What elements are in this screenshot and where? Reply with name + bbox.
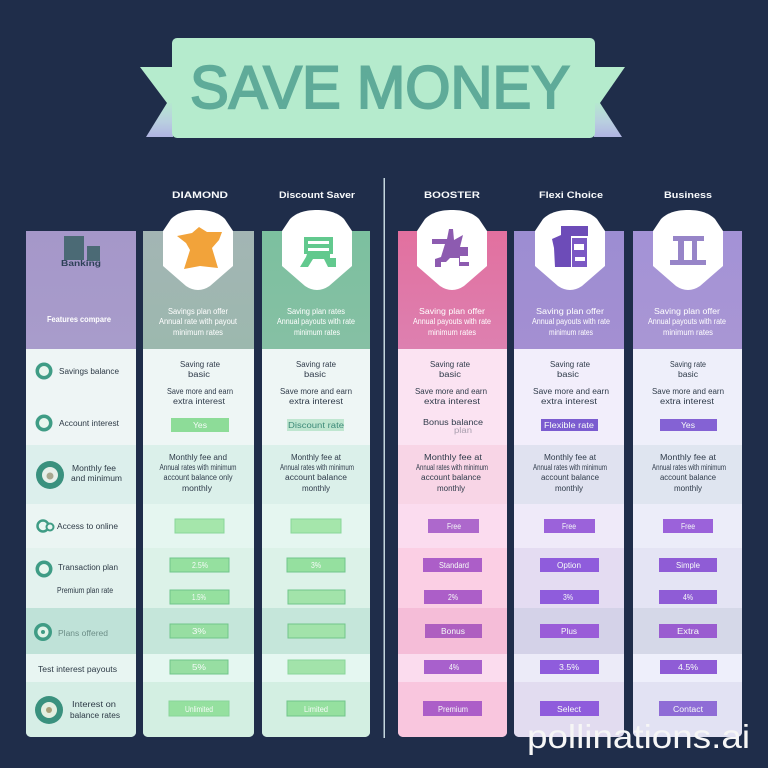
cell text: extra interest bbox=[289, 397, 344, 406]
cell text: basic bbox=[678, 370, 698, 379]
cell text: Monthly fee at bbox=[291, 453, 342, 462]
header description: Annual payouts with rate bbox=[532, 317, 610, 326]
value bar: 4% bbox=[449, 663, 459, 672]
header description: Annual payouts with rate bbox=[648, 317, 726, 326]
label: header description: Features compare bbox=[47, 315, 112, 324]
cell text: Saving rate bbox=[180, 360, 221, 369]
icon: orange hexagon bbox=[163, 210, 233, 290]
header description bbox=[159, 307, 238, 337]
value bar bbox=[171, 418, 229, 432]
row icon 1 bbox=[36, 362, 52, 380]
cell text bbox=[416, 453, 488, 493]
value bar: 3.5% bbox=[559, 663, 579, 672]
row label 8: Interest on bbox=[72, 700, 116, 709]
cell text: Annual rates with minimum bbox=[416, 463, 488, 472]
cell text bbox=[652, 453, 726, 493]
header description: Saving plan rates bbox=[287, 307, 345, 316]
row icon 6 bbox=[34, 623, 52, 641]
cell text: Save more and earn bbox=[652, 387, 724, 396]
column heading: DIAMOND bbox=[172, 190, 229, 200]
value bar bbox=[423, 558, 482, 572]
row label 1: Savings balance bbox=[59, 367, 120, 376]
panel: plan 2 green bbox=[262, 190, 370, 737]
row label 2: Account interest bbox=[59, 419, 120, 428]
value bar bbox=[540, 624, 599, 638]
cell text: Monthly fee at bbox=[424, 453, 483, 462]
value bar bbox=[544, 519, 595, 533]
title text: SAVE MONEY bbox=[190, 54, 570, 121]
cell text bbox=[533, 360, 609, 406]
cell text: Save more and earn bbox=[167, 387, 233, 396]
header description: minimum rates bbox=[549, 328, 593, 337]
value bar: 3% bbox=[563, 593, 573, 602]
value bar: Yes bbox=[681, 421, 695, 430]
value bar: Flexible rate bbox=[544, 421, 595, 430]
value bar bbox=[288, 590, 345, 604]
header description: Annual payouts with rate bbox=[277, 317, 355, 326]
header description bbox=[277, 307, 355, 337]
value bar bbox=[288, 660, 345, 674]
value bar bbox=[541, 419, 598, 431]
cell text: monthly bbox=[302, 484, 330, 493]
icon: buildings bbox=[61, 236, 101, 268]
value bar: 2% bbox=[448, 593, 458, 602]
value bar: Free bbox=[681, 522, 695, 531]
value bar: Free bbox=[447, 522, 461, 531]
cell text: Saving rate bbox=[430, 360, 471, 369]
cell text bbox=[652, 360, 724, 406]
cell text: Save more and earn bbox=[533, 387, 609, 396]
value bar: Standard bbox=[439, 561, 469, 570]
row icon 4 bbox=[38, 520, 54, 532]
row label 3: Monthly fee bbox=[72, 464, 117, 473]
cell text: extra interest bbox=[541, 397, 598, 406]
value bar bbox=[287, 419, 345, 431]
row label 8 bbox=[70, 700, 120, 720]
value bar bbox=[659, 701, 717, 716]
row icon 5 bbox=[36, 560, 52, 578]
header description: Saving plan offer bbox=[536, 307, 604, 316]
watermark: pollinations.ai bbox=[527, 718, 750, 755]
cell text bbox=[415, 360, 487, 406]
cell text: extra interest bbox=[173, 397, 226, 406]
icon: buildings: Banking bbox=[61, 259, 101, 268]
cell text: account balance bbox=[541, 473, 600, 482]
value bar: Option bbox=[557, 561, 581, 570]
row label 7: Test interest payouts bbox=[38, 665, 117, 674]
column heading: Business bbox=[664, 190, 712, 200]
row label 3 bbox=[71, 464, 122, 483]
cell text bbox=[280, 360, 352, 406]
cell text: Saving rate bbox=[670, 360, 706, 369]
value bar bbox=[170, 660, 228, 674]
cell text: Saving rate bbox=[550, 360, 591, 369]
cell text: Monthly fee at bbox=[660, 453, 717, 462]
value bar: Plus bbox=[561, 627, 577, 636]
header description: Saving plan offer bbox=[419, 307, 485, 316]
cell text: basic bbox=[304, 370, 326, 379]
value bar: Extra bbox=[677, 627, 700, 636]
header description: Saving plan offer bbox=[654, 307, 720, 316]
value bar: 3% bbox=[192, 627, 206, 636]
row icon 3 bbox=[36, 461, 64, 489]
cell text bbox=[280, 453, 354, 493]
value bar bbox=[660, 660, 717, 674]
value bar: 2.5% bbox=[192, 561, 208, 570]
cell text: extra interest bbox=[424, 397, 481, 406]
row label 8: balance rates bbox=[70, 711, 120, 720]
column heading: Flexi Choice bbox=[539, 190, 603, 200]
value bar: Free bbox=[562, 522, 576, 531]
cell text: account balance only bbox=[164, 473, 232, 482]
cell text: Annual rates with minimum bbox=[533, 463, 607, 472]
cell text: Monthly fee at bbox=[544, 453, 597, 462]
value bar bbox=[428, 519, 479, 533]
value bar bbox=[540, 590, 599, 604]
value bar bbox=[170, 624, 228, 638]
value bar bbox=[659, 558, 717, 572]
column heading: BOOSTER bbox=[424, 190, 481, 200]
value bar: Bonus bbox=[441, 627, 465, 636]
value bar bbox=[659, 590, 717, 604]
value bar bbox=[659, 624, 717, 638]
value bar bbox=[540, 660, 599, 674]
value bar: Simple bbox=[676, 561, 701, 570]
banner left ribbon tail bbox=[140, 67, 173, 137]
panel: plan 4 purple bbox=[514, 190, 624, 737]
value bar bbox=[424, 660, 482, 674]
icon: lavender hexagon bbox=[653, 210, 723, 290]
cell text: Monthly fee and bbox=[169, 453, 227, 462]
cell text: basic bbox=[188, 370, 210, 379]
value bar bbox=[287, 558, 345, 572]
value bar: Select bbox=[557, 705, 582, 714]
value bar bbox=[660, 419, 717, 431]
icon: purple hexagon bbox=[417, 210, 487, 290]
column heading: Discount Saver bbox=[279, 190, 356, 200]
header description bbox=[413, 307, 491, 337]
title banner bbox=[140, 38, 625, 138]
cell text bbox=[423, 418, 484, 435]
header description: minimum rates bbox=[663, 328, 713, 337]
value bar: 4% bbox=[683, 593, 693, 602]
header description: Savings plan offer bbox=[168, 307, 228, 316]
cell text: basic bbox=[439, 370, 461, 379]
panel: plan 5 purple bbox=[633, 190, 742, 737]
value bar bbox=[291, 519, 341, 533]
cell text: Annual rates with minimum bbox=[652, 463, 726, 472]
row label 6: Plans offered bbox=[58, 629, 108, 638]
value bar: 1.5% bbox=[192, 593, 206, 602]
value bar: Yes bbox=[193, 421, 207, 430]
value bar: 4.5% bbox=[678, 663, 698, 672]
cell text: basic bbox=[557, 370, 579, 379]
row label 5: Transaction plan bbox=[58, 563, 118, 572]
header description: Annual rate with payout bbox=[159, 317, 238, 326]
cell text: Saving rate bbox=[296, 360, 337, 369]
cell text: plan bbox=[454, 426, 472, 435]
panel: plan 1 green bbox=[143, 190, 254, 737]
cell text: monthly bbox=[182, 484, 212, 493]
value bar bbox=[287, 701, 345, 716]
row icon 2 bbox=[36, 414, 52, 432]
cell text bbox=[533, 453, 607, 493]
value bar bbox=[169, 701, 229, 716]
value bar: Contact bbox=[673, 705, 704, 714]
cell text: account balance bbox=[285, 473, 348, 482]
cell text: monthly bbox=[674, 484, 702, 493]
value bar bbox=[663, 519, 713, 533]
icon: green hexagon bbox=[282, 210, 352, 290]
header description bbox=[648, 307, 726, 337]
banner body bbox=[172, 38, 595, 138]
cell text: Bonus balance bbox=[423, 418, 484, 427]
cell text: Save more and earn bbox=[415, 387, 487, 396]
cell text: monthly bbox=[555, 484, 583, 493]
value bar bbox=[425, 624, 482, 638]
cell text: Save more and earn bbox=[280, 387, 352, 396]
value bar bbox=[288, 624, 345, 638]
value bar: Unlimited bbox=[185, 705, 213, 714]
value bar: Discount rate bbox=[288, 421, 345, 430]
cell text: monthly bbox=[437, 484, 465, 493]
header description: minimum rates bbox=[428, 328, 476, 337]
panel: plan 3 pink bbox=[398, 190, 507, 737]
header description: minimum rates bbox=[173, 328, 223, 337]
value bar: 3% bbox=[311, 561, 321, 570]
row label 4: Access to online bbox=[57, 522, 119, 531]
value bar bbox=[540, 558, 599, 572]
header description bbox=[532, 307, 610, 337]
value bar: Premium bbox=[438, 705, 468, 714]
value bar bbox=[170, 558, 229, 572]
value bar: 5% bbox=[192, 663, 206, 672]
value bar bbox=[540, 701, 599, 716]
value bar bbox=[170, 590, 229, 604]
cell text bbox=[167, 360, 233, 406]
center divider bbox=[384, 178, 385, 738]
panel: feature labels bbox=[26, 231, 136, 737]
row label 5: Premium plan rate bbox=[57, 586, 113, 595]
value bar bbox=[175, 519, 224, 533]
banner right ribbon tail bbox=[594, 67, 625, 137]
row label 5 bbox=[57, 563, 118, 595]
cell text: Annual rates with minimum bbox=[280, 463, 354, 472]
value bar: Limited bbox=[304, 705, 328, 714]
cell text: extra interest bbox=[660, 397, 715, 406]
header description: Annual payouts with rate bbox=[413, 317, 491, 326]
row icon 8 bbox=[35, 696, 63, 724]
cell text: Annual rates with minimum bbox=[160, 463, 237, 472]
value bar bbox=[423, 701, 482, 716]
value bar bbox=[424, 590, 482, 604]
cell text: account balance bbox=[421, 473, 482, 482]
cell text: account balance bbox=[660, 473, 717, 482]
icon: purple hexagon bbox=[535, 210, 605, 290]
cell text bbox=[160, 453, 237, 493]
header description: minimum rates bbox=[294, 328, 340, 337]
row label 3: and minimum bbox=[71, 474, 122, 483]
